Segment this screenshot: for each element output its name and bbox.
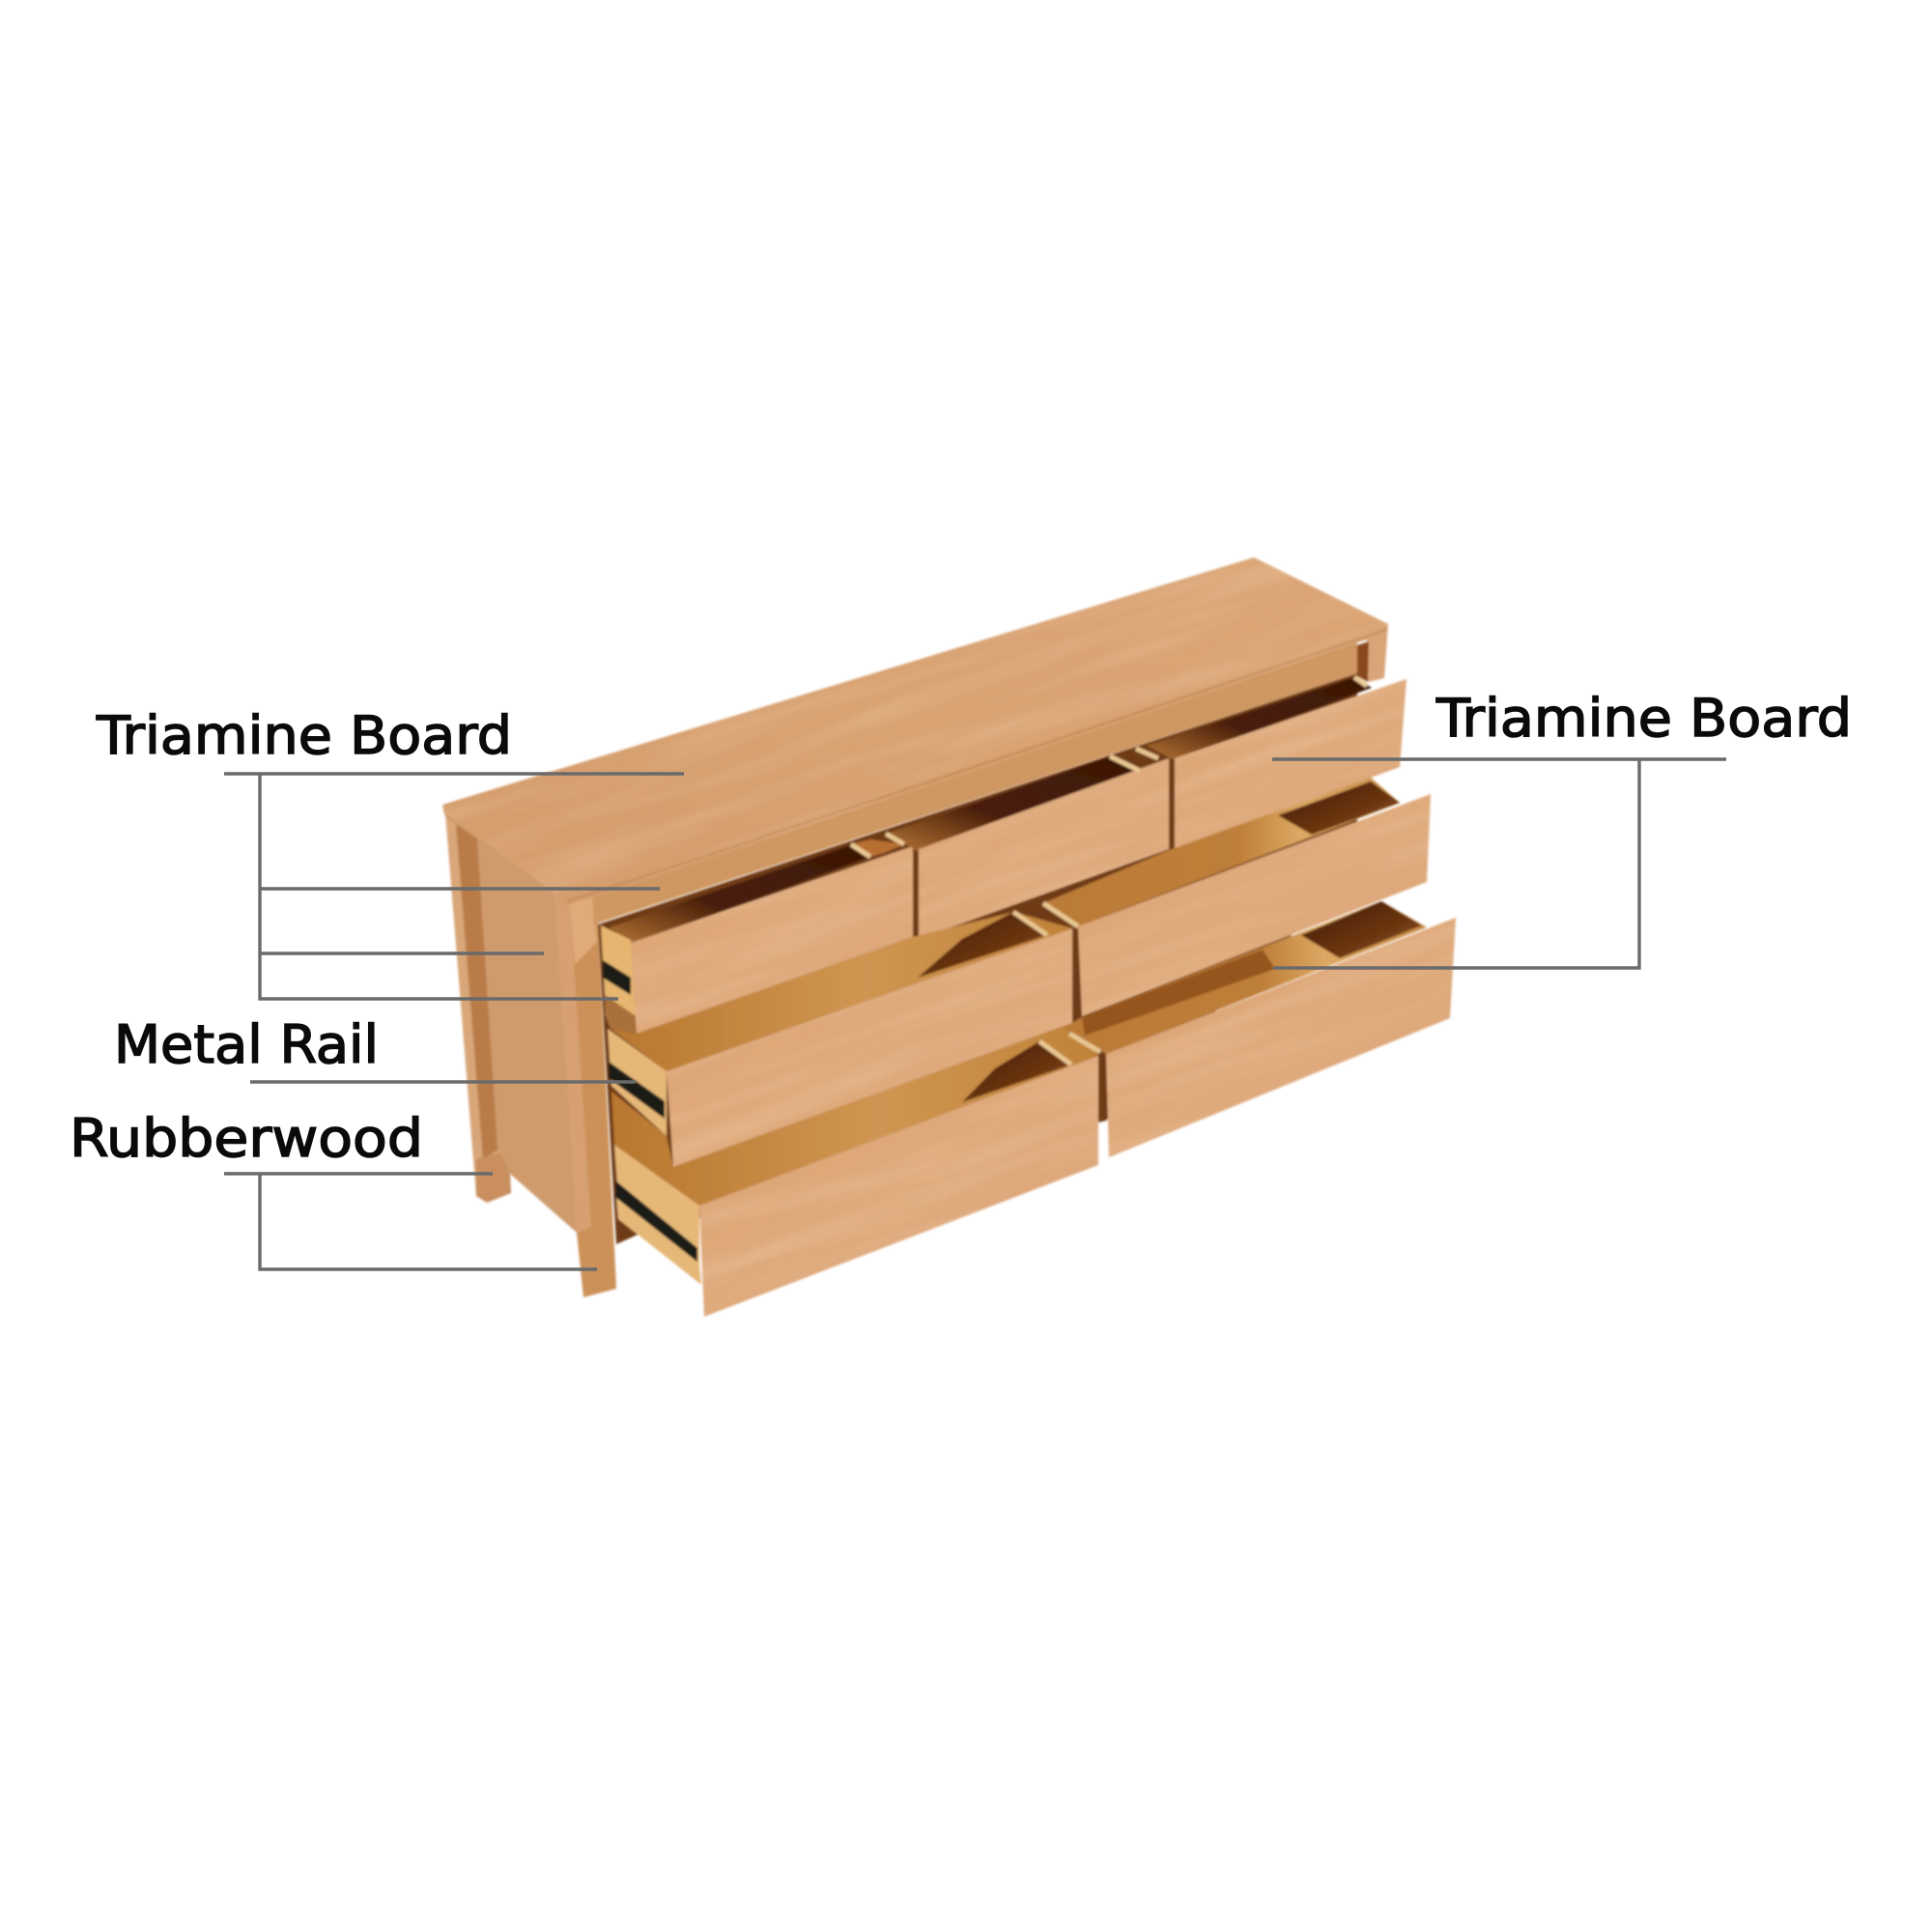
drawer 2 front <box>919 758 1169 939</box>
leader lines <box>224 1174 597 1269</box>
rear leg shadow strip <box>456 824 498 1159</box>
top rail <box>592 638 1357 924</box>
drawer 1 interior <box>610 844 870 945</box>
leader line <box>250 1080 636 1084</box>
drawer 6 side <box>614 1145 699 1273</box>
drawer 6 dark end <box>962 1041 1071 1102</box>
label text: Metal Rail <box>114 1014 379 1075</box>
drawer 4 floor <box>611 912 1072 1071</box>
drawer 4 dark end <box>918 912 1047 978</box>
drawer side bars <box>851 677 1367 1065</box>
drawer 1 bars <box>851 839 904 857</box>
drawer 7 floor <box>1063 901 1427 1054</box>
left side panel <box>442 808 577 1233</box>
drawer 4 side <box>608 1029 667 1136</box>
drawer 1 side <box>601 925 636 1016</box>
label group: Rubberwood <box>70 1108 597 1269</box>
front left post <box>554 894 616 1297</box>
drawer 4 rail <box>609 1062 665 1119</box>
drawer 1 front <box>631 846 913 1034</box>
label group: right Triamine Board <box>1272 688 1852 968</box>
rear leg foot <box>476 1150 511 1203</box>
label text: Rubberwood <box>70 1108 423 1169</box>
leader lines <box>224 774 684 999</box>
post capital <box>570 896 597 964</box>
drawer 6 front <box>699 1056 1098 1317</box>
wood grain overlay <box>444 564 1447 1279</box>
infographic: dresser materials diagram <box>73 556 1848 1318</box>
right post <box>1357 623 1388 682</box>
drawer 1 rail <box>603 960 631 995</box>
dresser illustration <box>442 557 1456 1317</box>
drawer 4 front <box>667 928 1072 1167</box>
drawer 5 dark end <box>1278 781 1400 835</box>
drawer 5 front <box>1078 794 1431 1016</box>
leader lines <box>1272 759 1726 968</box>
drawer 6 lower side <box>616 1198 701 1285</box>
opening shadow at right <box>1357 641 1369 682</box>
drawer 6 rail <box>615 1180 697 1267</box>
drawer 5 floor <box>1043 778 1400 926</box>
drawer 3 interior <box>1147 677 1372 760</box>
top board <box>442 557 1388 904</box>
drawer 7 front <box>1106 918 1456 1157</box>
cabinet interior <box>598 673 1357 1244</box>
label text: Triamine Board <box>1435 688 1852 749</box>
drawer 2 interior <box>887 756 1140 851</box>
label text: Triamine Board <box>96 705 512 766</box>
top board front edge <box>567 629 1387 901</box>
drawer 7 back shadow <box>1082 950 1275 1036</box>
drawer 1 under-piece <box>605 995 638 1034</box>
drawer 7 dark end <box>1301 901 1422 958</box>
post highlight <box>554 894 591 1233</box>
label group: top left Triamine Board <box>96 705 684 999</box>
drawer 3 front <box>1175 679 1406 849</box>
drawer 6 floor <box>611 1023 1098 1206</box>
rear left leg <box>445 813 511 1203</box>
